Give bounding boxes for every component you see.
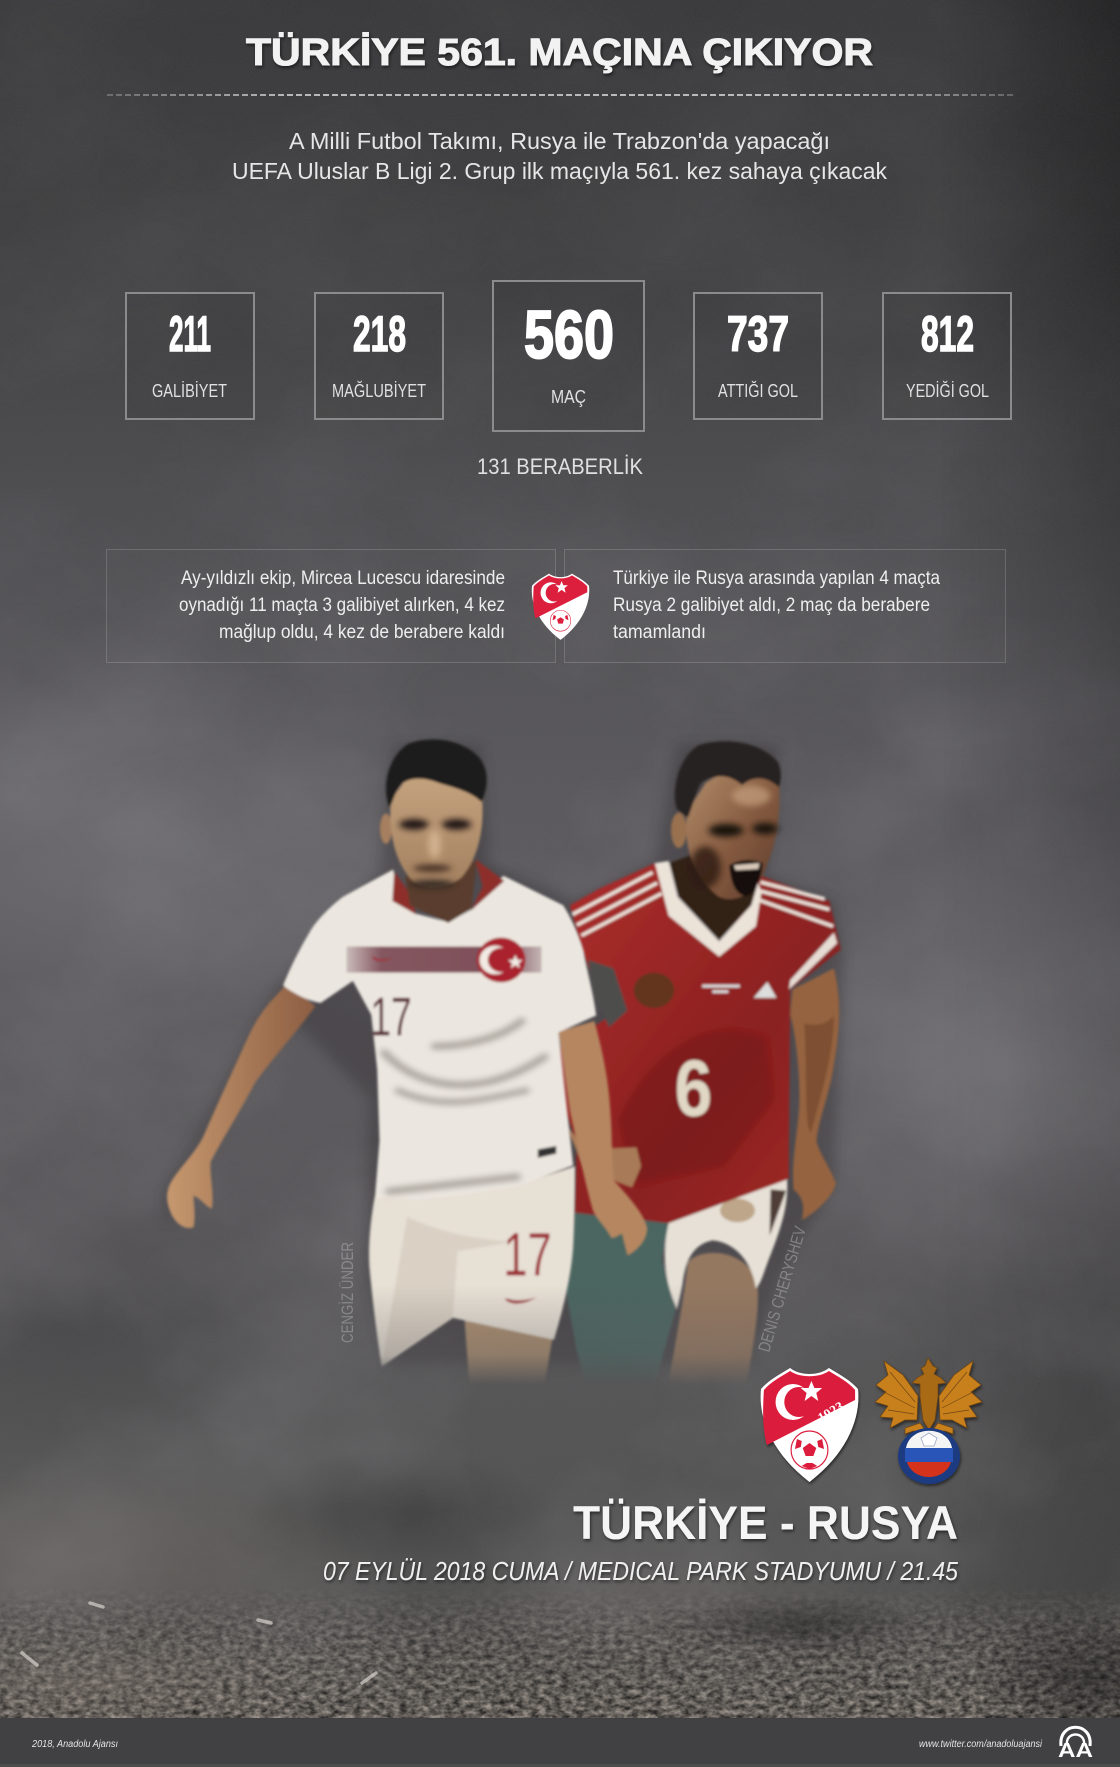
panel: Lucescu record: oynadığı 11 maçta 3 galibiyet alırken, 4 kez <box>179 595 505 616</box>
intro text <box>232 128 887 184</box>
collar <box>392 859 504 915</box>
stat: attığı gol <box>694 293 822 419</box>
head <box>686 769 779 899</box>
panel: Türkiye-Rusya record: Rusya 2 galibiyet aldı, 2 maç da berabere <box>613 595 930 616</box>
players photo <box>164 739 843 1410</box>
panel: Lucescu record <box>106 550 556 662</box>
stat: maç <box>493 281 644 431</box>
intro text: UEFA Uluslar B Ligi 2. Grup ilk maçıyla 561. kez sahaya çıkacak <box>232 158 887 184</box>
panel: Türkiye-Rusya record: tamamlandı <box>613 622 706 643</box>
shorts number: 17 <box>503 1220 552 1289</box>
panel: Lucescu record: mağlup oldu, 4 kez de berabere kaldı <box>219 622 505 643</box>
footer bar <box>0 1718 1120 1767</box>
panel: Türkiye-Rusya record: Türkiye ile Rusya arasında yapılan 4 maçta <box>613 568 940 589</box>
leg <box>464 1318 553 1410</box>
crown, heads and body <box>912 1358 946 1430</box>
chest band <box>346 946 542 973</box>
copyright: 2018, Anadolu Ajansı <box>31 1739 118 1750</box>
right arm <box>790 968 839 1220</box>
ear <box>671 813 687 848</box>
feet <box>905 1423 953 1434</box>
twitter url: www.twitter.com/anadoluajansi <box>919 1739 1043 1750</box>
red shirt <box>556 863 841 1223</box>
shirt <box>283 869 596 1200</box>
eagle <box>875 1358 982 1434</box>
panel: Lucescu record: Ay-yıldızlı ekip, Mircea Lucescu idaresinde <box>181 568 505 589</box>
icon: large TFF crest <box>761 1368 858 1482</box>
Denis Cheryshev <box>556 741 841 1410</box>
icon: AA logo <box>1058 1727 1093 1762</box>
stat: yediği gol <box>883 293 1011 419</box>
panel: Türkiye-Rusya record <box>564 550 1006 662</box>
white stripes and collar <box>572 872 833 936</box>
neck <box>405 861 477 923</box>
shirt crest <box>477 938 525 982</box>
shirt crests <box>634 973 674 1008</box>
left arm <box>167 983 315 1228</box>
match details: 07 EYLÜL 2018 CUMA / MEDICAL PARK STADYUMU / 21.45 <box>323 1556 958 1586</box>
shirt number: 17 <box>370 987 412 1048</box>
Cengiz Ünder <box>167 739 647 1410</box>
shirt folds <box>384 1021 545 1192</box>
stat: maç: MAÇ <box>551 387 586 407</box>
icon: AA logo: AA <box>1058 1740 1093 1762</box>
icon: large TFF crest: 1923 <box>815 1398 846 1426</box>
intro text: A Milli Futbol Takımı, Rusya ile Trabzon'da yapacağı <box>289 128 830 154</box>
right arm <box>559 1021 647 1256</box>
soft halo behind players <box>164 745 843 1368</box>
stat: mağlubiyet <box>315 293 443 419</box>
match title: TÜRKİYE - RUSYA <box>573 1496 958 1549</box>
stat: yediği gol: YEDİĞİ GOL <box>906 380 989 401</box>
neck <box>670 855 760 940</box>
swooshes <box>504 1298 536 1304</box>
shirt number: 6 <box>675 1043 712 1133</box>
stats row <box>126 281 1011 431</box>
stat: attığı gol: 737 <box>727 306 789 362</box>
stat: galibiyet: GALİBİYET <box>152 381 227 401</box>
icon: small TFF crest <box>532 574 589 640</box>
stat: yediği gol: 812 <box>921 306 974 362</box>
dashed divider <box>107 94 1014 96</box>
icon: Russian football union crest <box>875 1358 982 1484</box>
ball <box>898 1428 960 1484</box>
face shading <box>399 819 471 888</box>
stat: galibiyet <box>126 293 254 419</box>
shorts and leg <box>565 1213 676 1402</box>
right wing <box>939 1361 982 1428</box>
title: TÜRKİYE 561. MAÇINA ÇIKIYOR <box>246 31 873 74</box>
stat: maç: 560 <box>524 297 614 373</box>
stat: attığı gol: ATTIĞI GOL <box>718 380 798 401</box>
face shading <box>690 786 778 888</box>
player name: Cengiz Ünder: CENGİZ ÜNDER <box>338 1242 357 1343</box>
shorts <box>369 1166 575 1366</box>
stat: galibiyet: 211 <box>169 306 211 362</box>
player name: Denis Cheryshev: DENIS CHERYSHEV <box>755 1224 810 1354</box>
ear <box>380 813 392 844</box>
hidden hand <box>565 1126 641 1187</box>
stat: mağlubiyet: MAĞLUBİYET <box>332 380 426 401</box>
head <box>390 777 483 887</box>
open mouth <box>729 860 763 896</box>
left wing <box>875 1361 918 1428</box>
stat: mağlubiyet: 218 <box>353 306 406 362</box>
draws label: 131 BERABERLİK <box>477 454 643 479</box>
